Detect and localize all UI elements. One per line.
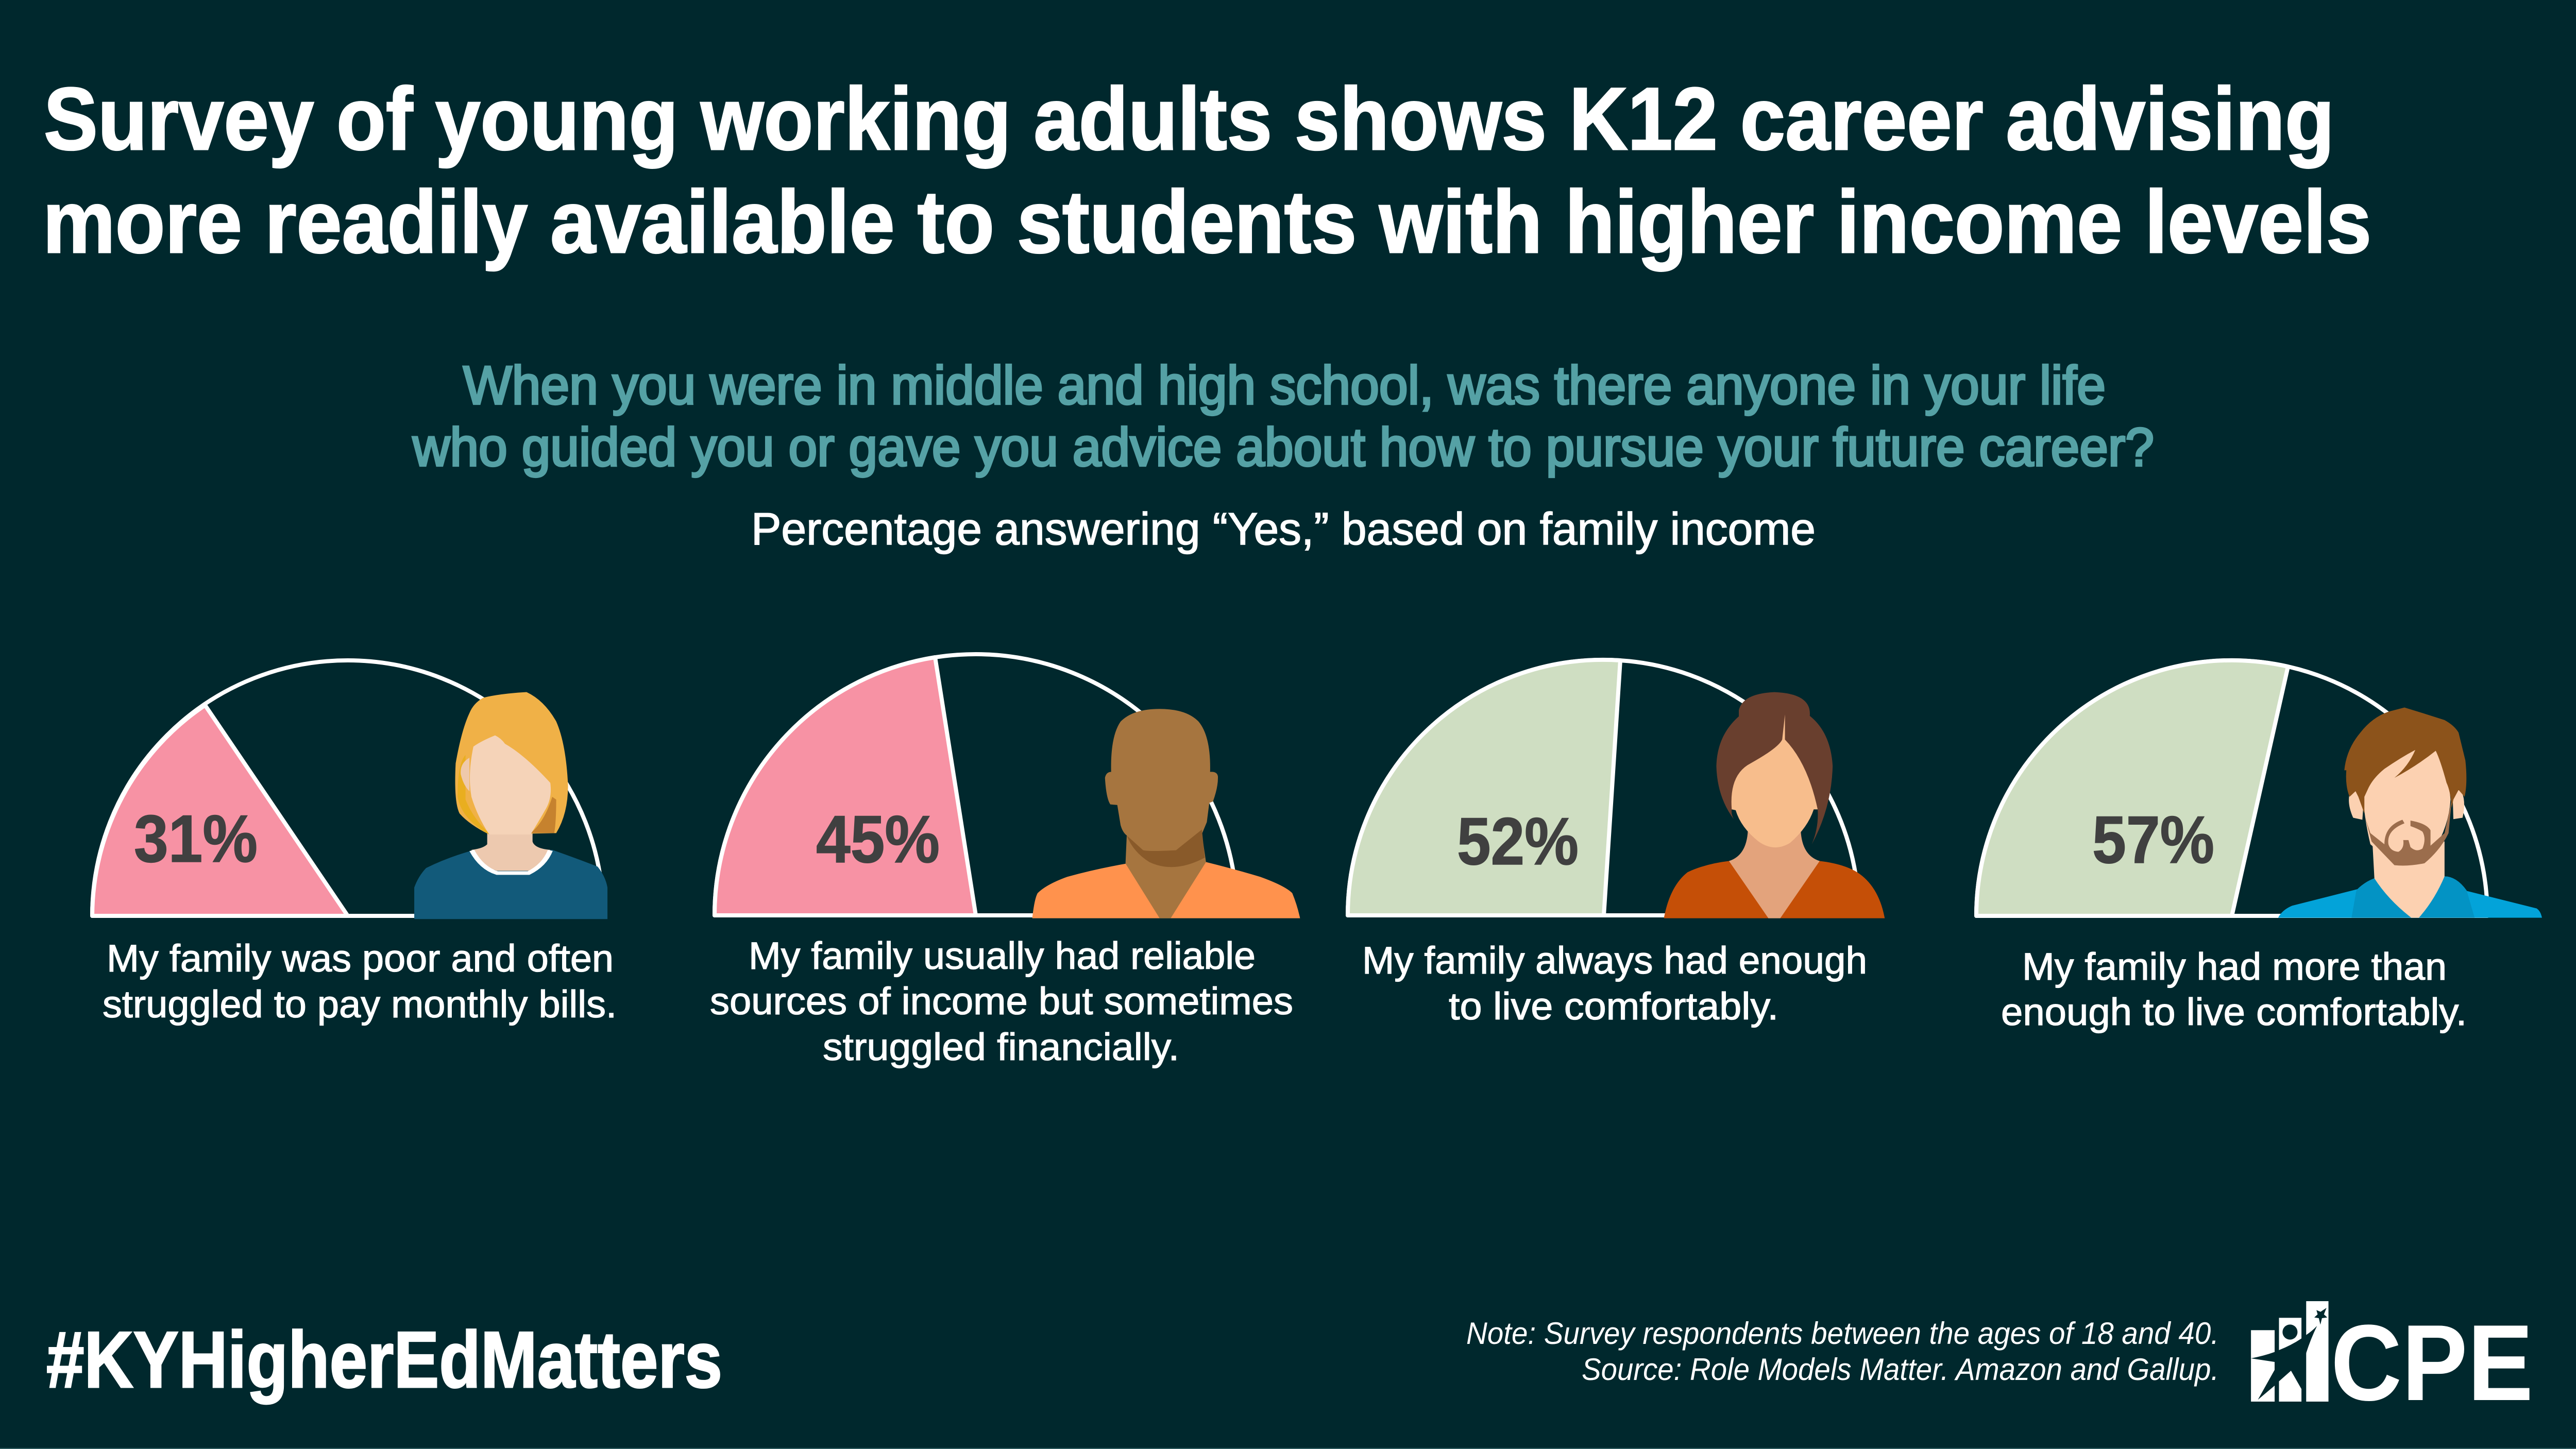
label: poor: struggled to pay monthly bills. [103, 983, 617, 1026]
gauge outline 52% [1348, 660, 1859, 915]
label: more than enough: enough to live comfortably. [2001, 991, 2467, 1033]
title [43, 70, 2371, 271]
gauge wedge 31% [92, 705, 348, 916]
label: more than enough [2001, 945, 2467, 1033]
hashtag: #KYHigherEdMatters [46, 1315, 722, 1404]
title: more readily available to students with higher income levels [43, 173, 2371, 271]
label: always enough: to live comfortably. [1449, 985, 1778, 1028]
icon: woman with blonde hair [414, 692, 607, 919]
logo: CPE [2251, 1301, 2533, 1423]
gauge outline 57% [1976, 660, 2487, 916]
panel: poor, 31% [92, 660, 617, 1026]
chart subtitle: Percentage answering “Yes,” based on family income [751, 503, 1816, 554]
gauge wedge 45% [715, 657, 976, 915]
source note: Source: Role Models Matter. Amazon and Gallup. [1582, 1352, 2219, 1387]
gauge outline 45% [715, 654, 1237, 915]
survey question: who guided you or gave you advice about how to pursue your future career? [412, 417, 2154, 478]
gauge wedge 52% [1348, 660, 1620, 915]
label: reliable income: sources of income but sometimes [710, 980, 1293, 1022]
label: always enough [1362, 939, 1867, 1028]
gauge outline 31% [92, 660, 603, 916]
panel: reliable income, 45% [710, 654, 1300, 1068]
label: poor: My family was poor and often [107, 937, 614, 980]
source note: Note: Survey respondents between the ages of 18 and 40. [1466, 1316, 2219, 1351]
icon: man with beard [2278, 707, 2542, 918]
label: reliable income: My family usually had reliable [749, 934, 1256, 977]
value 52%: 52% [1457, 804, 1579, 879]
survey question: When you were in middle and high school, was there anyone in your life [463, 355, 2106, 416]
label: always enough: My family always had enough [1362, 939, 1867, 982]
label: reliable income [710, 934, 1293, 1068]
icon: figure reaching for star [2251, 1301, 2329, 1402]
gauge wedge 57% [1976, 660, 2288, 916]
logo wordmark: CPE [2331, 1302, 2533, 1423]
label: more than enough: My family had more than [2022, 945, 2447, 988]
title: Survey of young working adults shows K12 career advising [44, 70, 2334, 168]
value 31%: 31% [134, 801, 258, 876]
survey question [412, 355, 2154, 478]
value 57%: 57% [2092, 802, 2214, 877]
panel: always enough, 52% [1348, 660, 1885, 1028]
icon: bald man [1032, 709, 1300, 918]
value 45%: 45% [816, 802, 940, 877]
source note [1466, 1316, 2219, 1387]
panel: more than enough, 57% [1976, 660, 2542, 1033]
label: reliable income: struggled financially. [823, 1026, 1179, 1068]
label: poor [103, 937, 617, 1026]
icon: woman with brown hair bun [1664, 692, 1885, 918]
